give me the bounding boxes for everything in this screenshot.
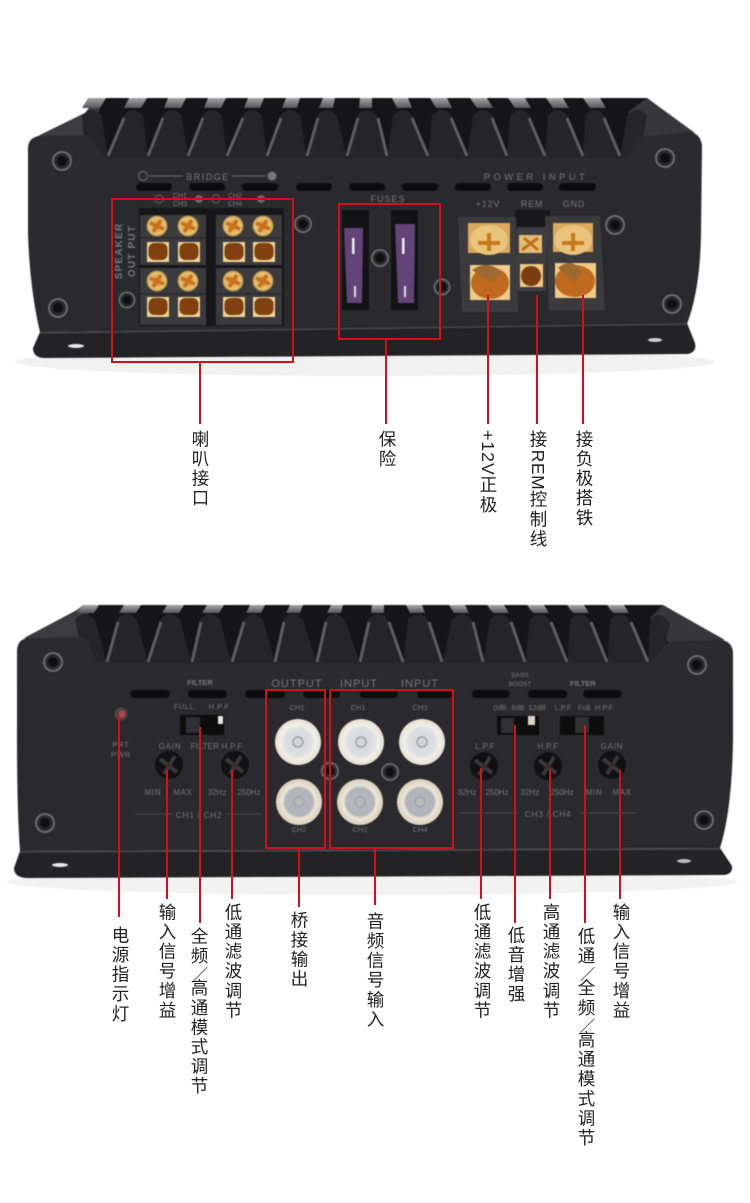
right gain and filter knobs — [458, 742, 638, 819]
heatsink fins — [24, 605, 725, 665]
left gain and filter knobs: MAX — [173, 788, 193, 797]
rca sockets: INPUT — [401, 678, 439, 690]
bridge label: CH3 — [173, 201, 187, 208]
label: bass boost: 低音增强 — [506, 926, 526, 1004]
right switches: FILTER — [570, 679, 596, 688]
right switches: BOOST — [509, 681, 531, 688]
right gain and filter knobs: 32Hz — [521, 788, 539, 797]
rca sockets: CH2 — [291, 825, 307, 834]
left gain and filter knobs: GAIN — [159, 742, 181, 751]
left filter switch — [174, 678, 229, 735]
left filter switch: FULL — [174, 702, 194, 711]
right switches — [493, 672, 614, 735]
right gain and filter knobs: L.P.F — [475, 742, 495, 751]
mounting bracket — [14, 848, 732, 878]
speaker output label: OUT PUT — [127, 225, 138, 277]
front plate — [17, 637, 733, 851]
label: high-pass adjust: 高通滤波调节 — [541, 903, 561, 1021]
callout box: bridged output — [266, 690, 325, 848]
label: fuse: 保险 — [377, 430, 397, 469]
left gain and filter knobs: CH1 / CH2 — [176, 810, 222, 820]
power input terminals: +12V — [476, 199, 500, 209]
power input terminals: POWER INPUT — [484, 172, 588, 183]
label: ground: 接负极搭铁 — [574, 430, 594, 528]
left gain and filter knobs: 250Hz — [237, 788, 261, 797]
left filter switch: H.P.F — [209, 702, 229, 711]
rca sockets: CH4 — [412, 825, 428, 834]
bridge label: BRIDGE — [186, 172, 230, 182]
callout box: audio input — [330, 690, 453, 848]
fuses: FUSES — [370, 194, 406, 204]
power input terminals — [458, 172, 605, 312]
bridge label: CH1 — [173, 193, 187, 200]
rca sockets — [271, 678, 445, 834]
speaker output label: SPEAKER — [114, 223, 125, 279]
left filter switch: FILTER — [187, 678, 213, 687]
rca sockets: CH1 — [350, 703, 366, 712]
amplifier photo: power and speaker side — [15, 98, 715, 376]
amplifier photo: control side — [7, 605, 737, 895]
bridge label — [138, 172, 276, 208]
right gain and filter knobs: CH3 / CH4 — [525, 809, 571, 819]
bridge label: CH4 — [228, 201, 242, 208]
right gain and filter knobs: 250Hz — [485, 788, 509, 797]
right gain and filter knobs: 250Hz — [550, 788, 574, 797]
power indicator led: PWR — [111, 750, 131, 759]
right switches: H.P.F — [595, 703, 614, 712]
rca sockets: INPUT — [340, 678, 378, 690]
right gain and filter knobs: GAIN — [601, 742, 623, 751]
left gain and filter knobs: H.P.F — [222, 742, 242, 751]
mounting bracket — [33, 323, 695, 358]
rca sockets: CH1 — [289, 703, 305, 712]
speaker output label — [114, 223, 138, 279]
vent slots — [140, 183, 592, 191]
right gain and filter knobs: H.P.F — [538, 742, 558, 751]
right gain and filter knobs: MIN — [586, 788, 602, 797]
right switches: Full — [578, 703, 590, 712]
power input terminals: GND — [563, 199, 585, 209]
speaker terminal block — [139, 208, 284, 326]
label: +12V positive: +12V 正极 — [478, 430, 498, 515]
rca sockets: CH3 — [412, 703, 428, 712]
label: input gain left: 输入信号增益 — [157, 903, 177, 1021]
label: low / full / high-pass mode: 低通 ／ 全频 ／ 高通模式调节 — [576, 927, 596, 1148]
right switches: 12dB — [528, 703, 546, 712]
label: input gain right: 输入信号增益 — [611, 903, 631, 1021]
left gain and filter knobs: MIN — [145, 788, 161, 797]
power indicator led — [111, 708, 131, 759]
label: audio signal input: 音频信号输入 — [365, 912, 385, 1030]
rca sockets: OUTPUT — [271, 678, 323, 690]
right switches: 6dB — [511, 703, 525, 712]
power input terminals: REM — [521, 199, 543, 209]
leader lines: top photo — [200, 295, 583, 424]
callout box: speaker terminals — [112, 199, 293, 362]
right switches: BASS — [511, 672, 529, 679]
label: low-pass adjust left: 低通滤波调节 — [223, 903, 243, 1021]
label: full / high-pass mode: 全频 ／ 高通模式调节 — [189, 927, 209, 1096]
label: speaker terminals: 喇叭接口 — [190, 430, 210, 508]
vent slots — [134, 690, 618, 698]
right switches: 0dB — [493, 703, 507, 712]
label: REM control wire: 接 REM 控制线 — [528, 430, 548, 549]
callout box: fuses — [339, 204, 440, 339]
left gain and filter knobs — [135, 742, 262, 820]
label: low-pass adjust right: 低通滤波调节 — [472, 903, 492, 1021]
bridge label: CH2 — [228, 193, 242, 200]
label: bridged output: 桥接输出 — [289, 911, 309, 989]
rca sockets: CH2 — [352, 825, 368, 834]
mounting screws — [48, 148, 682, 318]
right gain and filter knobs: 32Hz — [458, 788, 476, 797]
left gain and filter knobs: 32Hz — [208, 788, 226, 797]
heatsink fins — [36, 98, 695, 160]
label: power indicator: 电源指示灯 — [110, 926, 130, 1024]
fuses — [342, 194, 418, 310]
right switches: L.P.F — [555, 703, 572, 712]
right gain and filter knobs: MAX — [612, 788, 632, 797]
front plate — [28, 132, 702, 332]
leader lines: bottom photo — [119, 715, 620, 923]
mounting screws — [35, 652, 714, 833]
power indicator led: PRT — [112, 740, 130, 749]
left gain and filter knobs: FILTER — [191, 742, 219, 751]
